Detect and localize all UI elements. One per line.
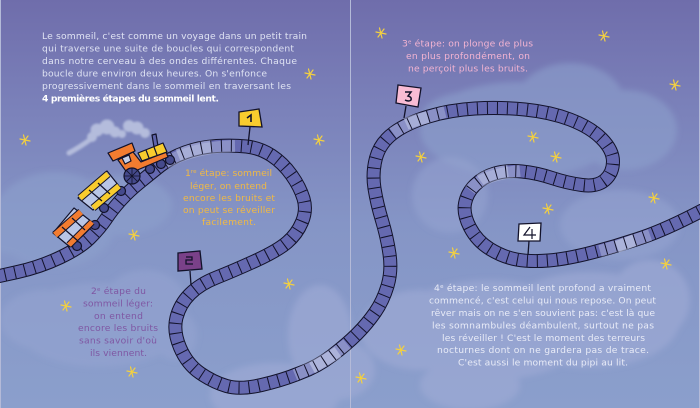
step 3 text: 3 xyxy=(402,38,408,50)
step 4 text: nocturnes dont on ne gardera pas de trace. xyxy=(437,345,649,356)
intro text xyxy=(42,31,307,104)
step 3 text: étape: on plonge de plus xyxy=(412,38,533,50)
intro text: Le sommeil, c'est comme un voyage dans un petit train xyxy=(42,31,307,42)
intro text: boucle dure environ deux heures. On s'enfonce xyxy=(42,68,267,80)
step 1 text: étape: sommeil xyxy=(197,168,272,179)
step 2 text: sommeil léger: xyxy=(83,298,153,310)
sign 2 xyxy=(178,251,202,285)
orange wagon xyxy=(53,208,100,250)
step 2 text: ils viennent. xyxy=(90,348,147,359)
sign 1 xyxy=(239,109,262,145)
sign 3 xyxy=(396,85,421,118)
intro text: 4 premières étapes du sommeil lent. xyxy=(42,94,219,104)
step 1 text xyxy=(183,168,275,228)
step 1 text: on peut se réveiller xyxy=(183,205,275,216)
intro text: progressivement dans le sommeil en traversant les xyxy=(42,81,291,92)
step 2 text: e xyxy=(97,287,101,293)
step 1 text: 1 xyxy=(185,168,191,179)
step 4 text: rêver mais on ne s'en souvient pas: c'est là que xyxy=(431,308,655,319)
step 1 text: re xyxy=(191,169,197,175)
step 4 text xyxy=(429,283,656,368)
step 2 text: 2 xyxy=(91,286,97,297)
step 1 text: encore les bruits et xyxy=(183,193,275,204)
sign 4 xyxy=(518,223,541,255)
step 4 text: les somnambules déambulent, surtout ne pas xyxy=(432,320,654,332)
smoke xyxy=(69,120,150,153)
step 4 text: e xyxy=(440,284,444,290)
yellow wagon xyxy=(78,171,126,212)
step 2 text xyxy=(78,286,158,359)
step 2 text: on entend xyxy=(94,311,143,322)
step 1 text: facilement. xyxy=(202,217,256,228)
step 4 text: commencé, c'est celui qui nous repose. On peut xyxy=(429,296,656,306)
light sections of the track xyxy=(165,112,650,375)
step 4 text: C'est aussi le moment du pipi au lit. xyxy=(458,358,628,368)
railway track xyxy=(0,108,700,388)
step 2 text: sans savoir d'où xyxy=(79,336,157,346)
step 3 text: e xyxy=(408,40,412,46)
intro text: dans notre cerveau à des ondes différentes. Chaque xyxy=(42,56,297,67)
step 2 text: encore les bruits xyxy=(78,323,158,334)
train xyxy=(53,134,174,250)
step 4 text: étape: le sommeil lent profond a vraiment xyxy=(444,283,651,294)
locomotive xyxy=(108,134,174,184)
step 3 text: en plus profondément, on xyxy=(406,51,530,62)
step 2 text: étape du xyxy=(101,286,146,297)
intro text: qui traverse une suite de boucles qui correspondent xyxy=(42,44,294,54)
step 4 text: les réveiller ! C'est le moment des terreurs xyxy=(442,333,645,344)
step 3 text xyxy=(402,38,533,74)
step 3 text: ne perçoit plus les bruits. xyxy=(408,64,528,74)
step 4 text: 4 xyxy=(434,283,440,294)
step 1 text: léger, on entend xyxy=(190,181,267,192)
